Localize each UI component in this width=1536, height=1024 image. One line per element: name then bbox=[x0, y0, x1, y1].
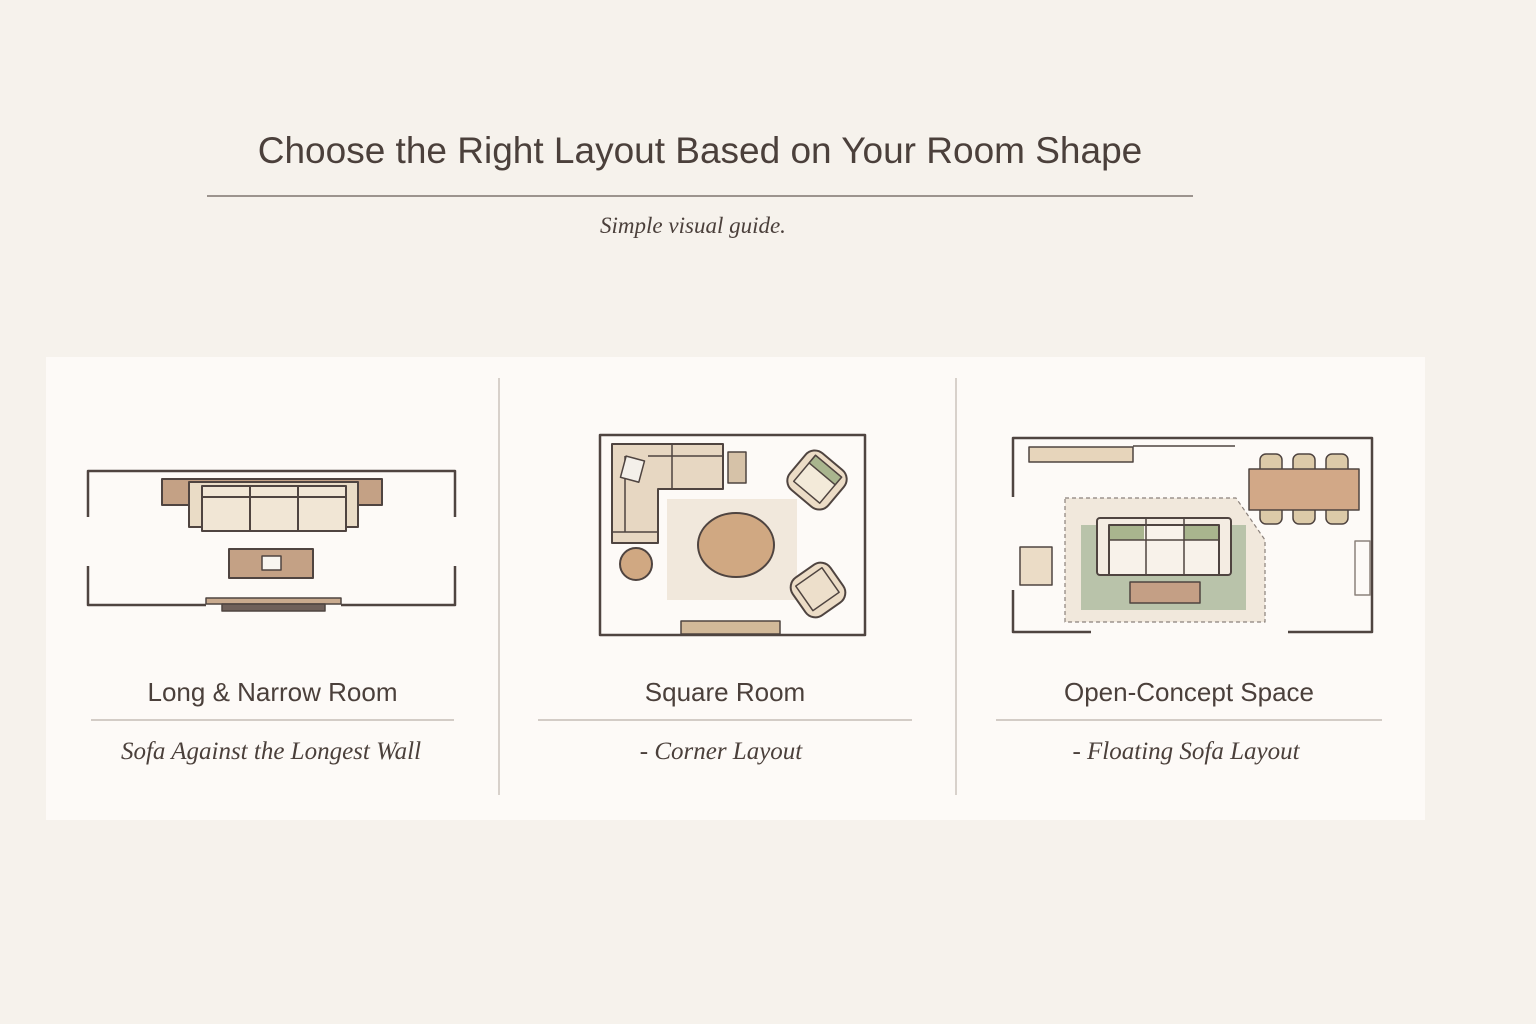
heading: long & narrow: Long & Narrow Room bbox=[148, 677, 398, 707]
caption: square: - Corner Layout bbox=[640, 738, 802, 765]
plan: square bbox=[600, 435, 865, 635]
panel: layouts bbox=[46, 357, 1425, 820]
plan: long narrow bbox=[88, 471, 455, 611]
caption: long & narrow: Sofa Against the Longest Wall bbox=[121, 738, 421, 765]
title: Choose the Right Layout Based on Your Room Shape bbox=[258, 130, 1142, 171]
plan: open concept bbox=[1013, 438, 1372, 632]
heading: open concept: Open-Concept Space bbox=[1064, 677, 1314, 707]
heading: square: Square Room bbox=[645, 677, 805, 707]
caption: open concept: - Floating Sofa Layout bbox=[1072, 738, 1300, 765]
subtitle: Simple visual guide. bbox=[600, 213, 786, 238]
